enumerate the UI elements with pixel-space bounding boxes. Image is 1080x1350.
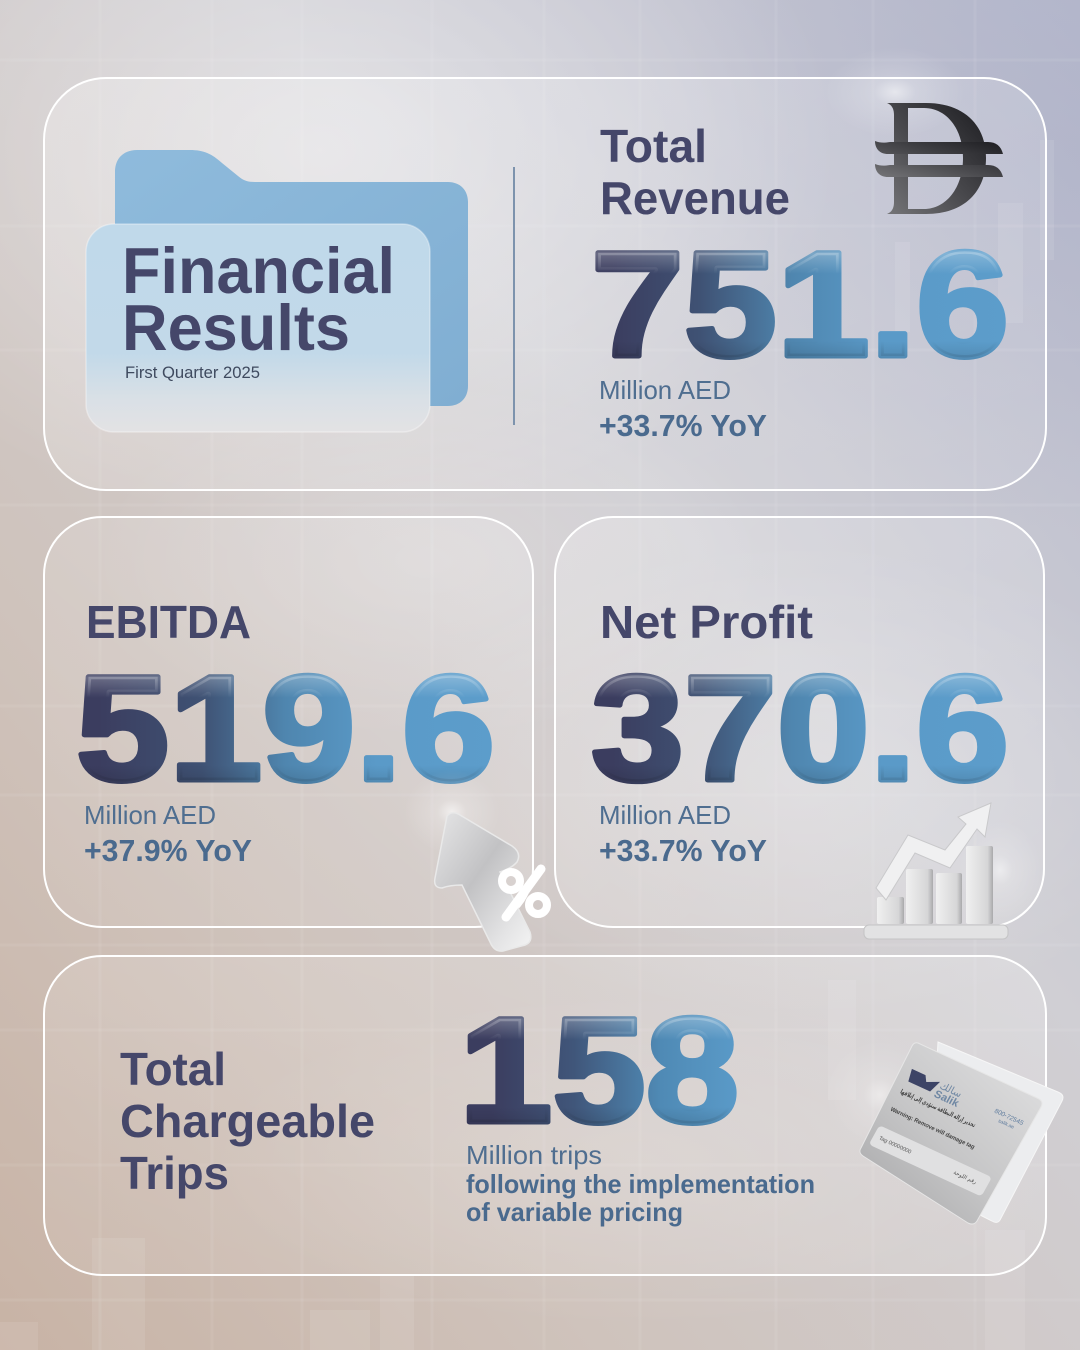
number: 158: 158 <box>459 986 739 1154</box>
EBITDA details: Million AED <box>84 800 216 830</box>
tag printed details: سالك <box>937 1081 964 1100</box>
heading: financial results <box>126 246 391 381</box>
tag printed details: 800-72545 <box>993 1108 1025 1127</box>
tag printed details <box>869 1067 1026 1197</box>
heading: EBITDA: EBITDA <box>86 596 251 648</box>
number: 751.6 <box>595 248 1006 360</box>
panel: net profit <box>555 517 1044 927</box>
trips details: following the implementation <box>466 1169 815 1199</box>
tag printed details: رقم اللوحة <box>952 1170 978 1186</box>
tag printed details: salik.ae <box>997 1118 1015 1131</box>
number: 519.6: 519.6 <box>76 644 495 812</box>
icon: Salik tag packets <box>860 1041 1064 1224</box>
heading: total revenue: Revenue <box>600 172 790 224</box>
number: 751.6: 751.6 <box>591 220 1009 388</box>
revenue details: +33.7% YoY <box>599 408 767 443</box>
tag printed details: Tag 00000000 <box>878 1136 912 1155</box>
heading: total revenue <box>600 128 788 214</box>
EBITDA details <box>85 805 252 862</box>
heading: financial results: Financial <box>122 234 395 307</box>
number: 751.6: 751.6 <box>591 220 1009 388</box>
heading: total chargeable trips: Trips <box>120 1147 229 1199</box>
trips details: of variable pricing <box>466 1197 683 1227</box>
number: 370.6: 370.6 <box>591 644 1009 812</box>
trips details: Million trips <box>466 1140 602 1170</box>
number: 158 <box>466 1014 737 1126</box>
tag printed details: Salik <box>932 1088 962 1110</box>
panel: EBITDA <box>44 517 533 927</box>
percent sign <box>502 869 547 917</box>
panel: financial results and total revenue <box>44 47 1046 490</box>
heading: total chargeable trips: Total <box>120 1043 226 1095</box>
heading: net profit: Net Profit <box>600 596 813 648</box>
heading: financial results: Results <box>122 291 350 364</box>
EBITDA details: +37.9% YoY <box>84 833 252 868</box>
heading: total revenue: Total <box>600 120 707 172</box>
net profit details <box>600 805 766 862</box>
heading: financial results: First Quarter 2025 <box>125 363 260 382</box>
number: 370.6: 370.6 <box>591 644 1009 812</box>
number: 158: 158 <box>459 986 739 1154</box>
number: 519.6 <box>78 672 492 784</box>
trips details <box>466 1140 815 1227</box>
heading: total chargeable trips: Chargeable <box>120 1095 375 1147</box>
icon: bar chart with arrow <box>864 802 1012 940</box>
icon: folder <box>86 150 468 432</box>
revenue details <box>600 380 766 436</box>
icon: percent arrow <box>430 776 551 952</box>
net profit details: +33.7% YoY <box>599 833 767 868</box>
net profit details: Million AED <box>599 800 731 830</box>
heading: total chargeable trips <box>120 1043 375 1199</box>
tag printed details: Warning: Remove will damage tag <box>889 1107 976 1151</box>
number: 519.6: 519.6 <box>76 644 495 812</box>
tag printed details: تحذير إزالة البطاقة ستؤدي إلى إتلافها <box>899 1088 977 1129</box>
revenue details: Million AED <box>599 375 731 405</box>
icon: dirham symbol <box>863 66 1003 214</box>
number: 370.6 <box>592 672 1006 784</box>
panel: total chargeable trips <box>44 956 1046 1275</box>
